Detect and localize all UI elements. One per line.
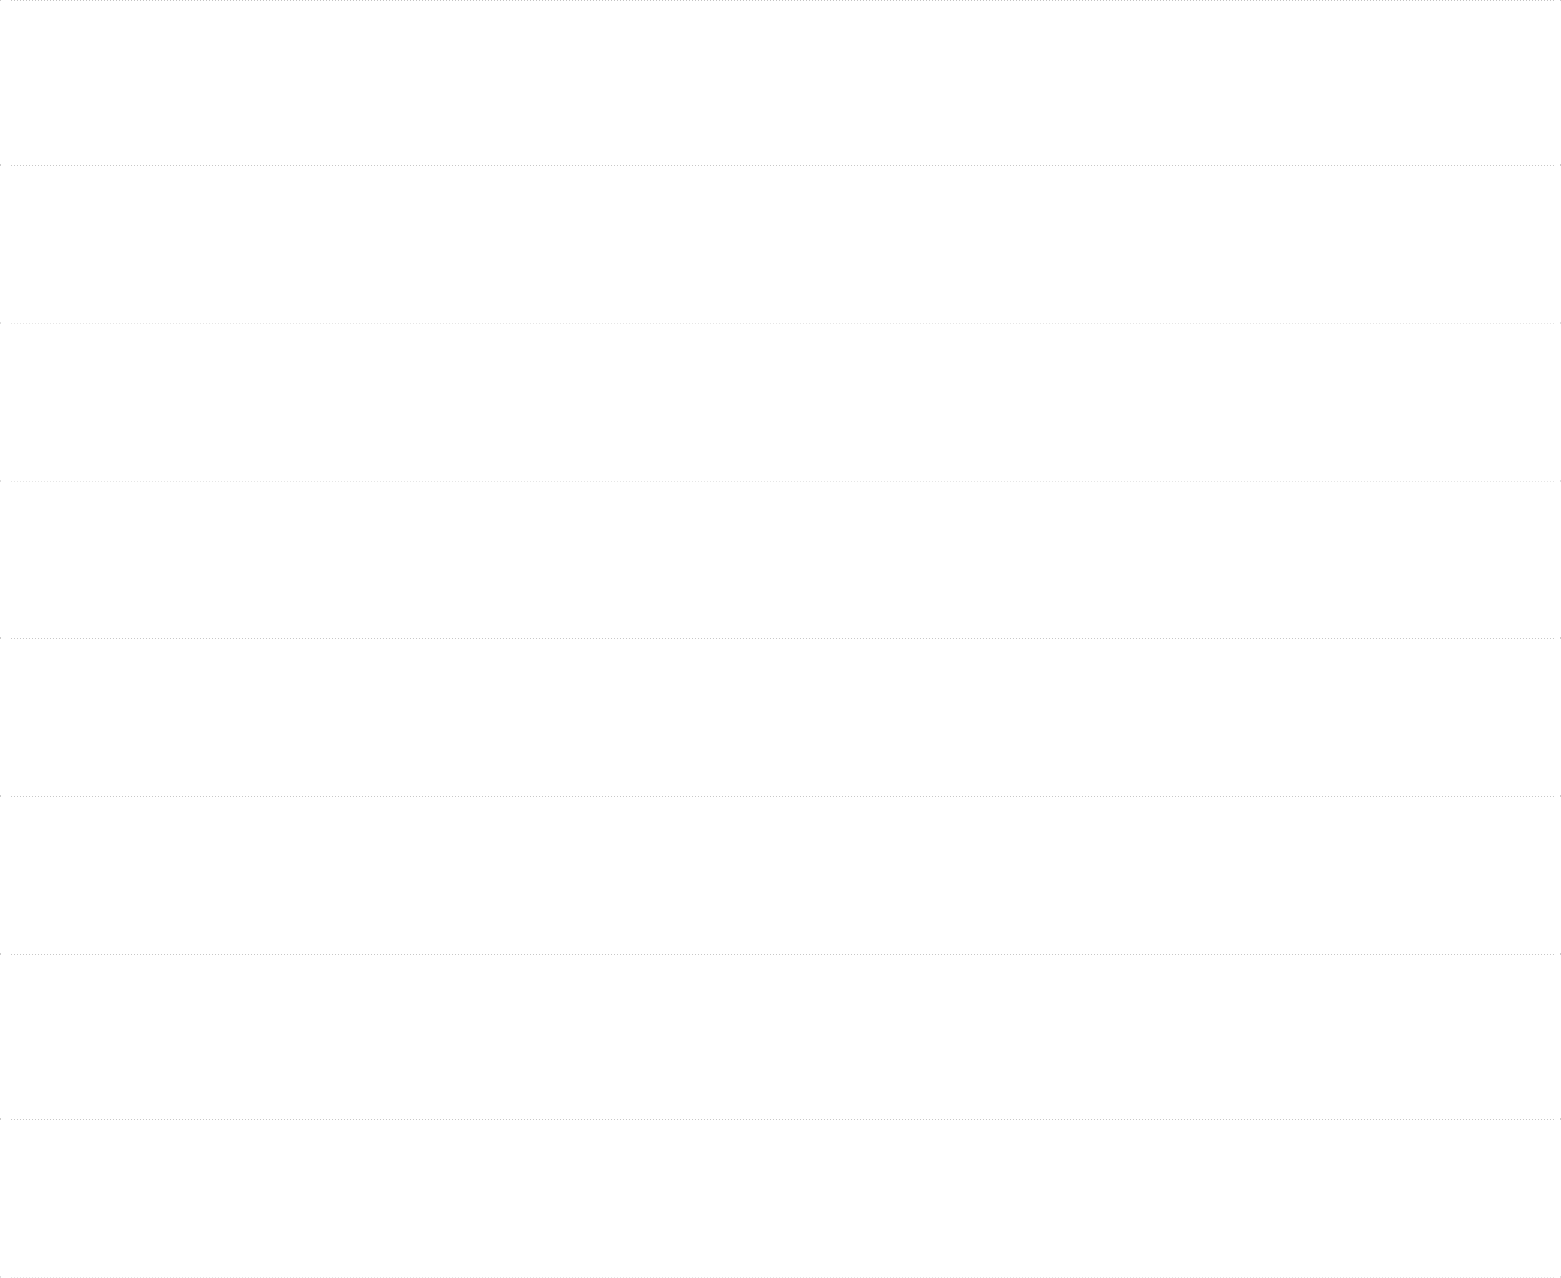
divider line 7: [0, 953, 1561, 955]
divider line 4: [0, 480, 1561, 482]
divider line 9: [0, 1276, 1561, 1278]
divider line 3: [0, 322, 1561, 324]
divider line 8: [0, 1118, 1561, 1120]
divider line 5: [0, 637, 1561, 639]
divider line 2: [0, 164, 1561, 166]
divider line 6: [0, 795, 1561, 797]
divider line 1: [0, 0, 1561, 1]
